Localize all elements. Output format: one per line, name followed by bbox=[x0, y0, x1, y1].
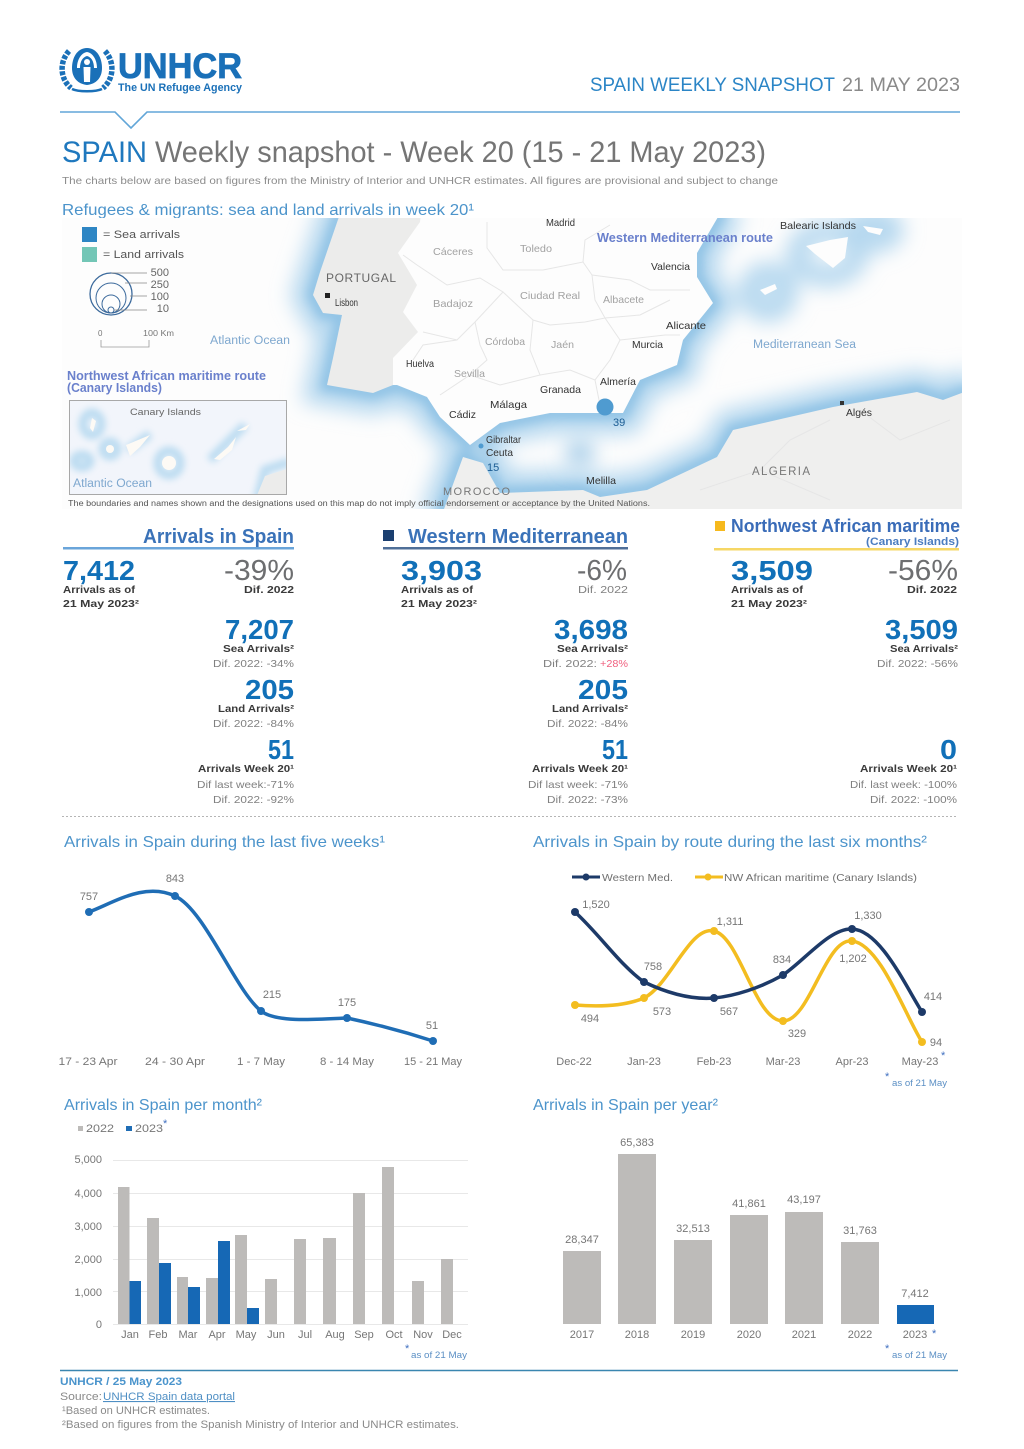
place labels: Alicante bbox=[666, 320, 706, 332]
place labels: Madrid bbox=[546, 217, 575, 229]
chart: arrivals by route: Mar-23 bbox=[766, 1056, 800, 1068]
panel: Arrivals in Spain: 7,207 bbox=[225, 614, 294, 645]
header rule with notch bbox=[60, 112, 960, 128]
logo: UNHCR bbox=[62, 47, 243, 94]
logo: UNHCR: UNHCR bbox=[118, 47, 242, 86]
chart: arrivals last five weeks: 51 bbox=[426, 1020, 438, 1032]
chart: arrivals per month: Oct bbox=[385, 1329, 403, 1341]
panel: Western Mediterranean: Arrivals as of bbox=[401, 584, 474, 596]
chart: arrivals per month: Jun bbox=[267, 1329, 285, 1341]
panel: Arrivals in Spain: -39% bbox=[224, 555, 294, 587]
route labels: (Canary Islands) bbox=[67, 381, 162, 395]
footer: ¹Based on UNHCR estimates. bbox=[62, 1405, 210, 1417]
chart: arrivals by route: Dec-22 bbox=[556, 1056, 592, 1068]
panel: Arrivals in Spain: Dif. 2022: -84% bbox=[213, 718, 294, 730]
place labels: Cádiz bbox=[449, 409, 476, 421]
place labels: Cáceres bbox=[433, 246, 473, 258]
panel: Western Mediterranean: Western Mediterranean bbox=[408, 526, 628, 548]
panel: Northwest African maritime: 21 May 2023² bbox=[731, 598, 808, 610]
place labels: PORTUGAL bbox=[326, 271, 396, 285]
chart: arrivals by route: 834 bbox=[773, 954, 791, 966]
chart legend: NW African maritime (Canary Islands) bbox=[724, 872, 917, 884]
place labels: Badajoz bbox=[433, 298, 473, 310]
land: Spain bbox=[393, 218, 718, 445]
chart: arrivals by route: 758 bbox=[644, 961, 662, 973]
place labels: Ceuta bbox=[486, 447, 513, 459]
chart: arrivals by route: 494 bbox=[581, 1013, 599, 1025]
chart: arrivals per month: Sep bbox=[354, 1329, 374, 1341]
chart: arrivals per month: May bbox=[236, 1329, 257, 1341]
chart: arrivals last five weeks: Arrivals in Spain during the last five weeks¹ bbox=[64, 834, 385, 851]
panel: Arrivals in Spain: Dif. 2022 bbox=[244, 584, 294, 596]
place labels: Murcia bbox=[632, 339, 663, 351]
panel: Northwest African maritime: Sea Arrivals² bbox=[890, 643, 959, 655]
panel: Arrivals in Spain: Dif. 2022: -92% bbox=[213, 794, 294, 806]
chart: arrivals last five weeks: 215 bbox=[263, 989, 281, 1001]
subtitle: The charts below are based on figures from the Ministry of Interior and UNHCR estimates. All figures are provisional and subject to change bbox=[62, 175, 778, 187]
place labels: Lisbon bbox=[335, 297, 358, 309]
chart: arrivals last five weeks: 15 - 21 May bbox=[404, 1056, 462, 1068]
map legend: 10 bbox=[157, 303, 169, 315]
chart: arrivals per month: 5,000 bbox=[74, 1154, 102, 1166]
chart: arrivals per year: 2017 bbox=[570, 1329, 594, 1341]
panel: Western Mediterranean: 51 bbox=[602, 734, 628, 765]
map legend: = Sea arrivals bbox=[103, 229, 181, 241]
title: SPAIN bbox=[62, 136, 147, 169]
panel: Western Mediterranean: Dif. 2022 bbox=[578, 584, 628, 596]
note bbox=[885, 1071, 948, 1088]
note bbox=[885, 1343, 948, 1360]
chart: arrivals per year: 2022 bbox=[848, 1329, 872, 1341]
map legend: 100 bbox=[151, 291, 169, 303]
inset: Canary Islands: Canary Islands bbox=[130, 407, 201, 418]
route labels: Western Mediterranean route bbox=[597, 231, 773, 245]
panel: Arrivals in Spain: Arrivals in Spain bbox=[143, 526, 294, 548]
chart: arrivals per month: 0 bbox=[96, 1319, 102, 1331]
panel: Northwest African maritime bbox=[714, 515, 960, 806]
note: as of 21 May bbox=[411, 1350, 468, 1360]
map: sea, coast and land bbox=[313, 205, 975, 520]
note: * bbox=[885, 1071, 890, 1083]
panel: Western Mediterranean: Dif last week: -71% bbox=[528, 779, 628, 791]
panel: Western Mediterranean: Arrivals Week 20¹ bbox=[532, 763, 629, 775]
chart: arrivals by route: 1,311 bbox=[717, 916, 743, 928]
panel: Western Mediterranean: Dif. 2022: -84% bbox=[547, 718, 628, 730]
chart: arrivals by route: 94 bbox=[930, 1037, 942, 1049]
chart legend: 2022 bbox=[86, 1123, 114, 1135]
chart: arrivals per month: Dec bbox=[442, 1329, 462, 1341]
place labels: Melilla bbox=[586, 475, 616, 487]
chart: arrivals per year: 2023 bbox=[903, 1329, 927, 1341]
panel: Western Mediterranean: -6% bbox=[577, 555, 627, 587]
inset: Canary Islands bbox=[69, 400, 287, 495]
place labels bbox=[325, 217, 872, 498]
chart: arrivals per year: 31,763 bbox=[843, 1225, 877, 1237]
footer: UNHCR Spain data portal bbox=[103, 1391, 235, 1403]
map legend: 0 bbox=[98, 329, 103, 338]
chart: arrivals per year: 65,383 bbox=[620, 1137, 654, 1149]
chart legend bbox=[78, 1118, 168, 1135]
chart: arrivals by route: 414 bbox=[924, 991, 942, 1003]
chart: arrivals per month: Aug bbox=[325, 1329, 345, 1341]
chart: arrivals by route: Arrivals in Spain by route during the last six months² bbox=[533, 834, 928, 851]
place labels: Córdoba bbox=[485, 336, 525, 348]
chart: arrivals per year: Arrivals in Spain per year² bbox=[533, 1097, 719, 1114]
panel: Northwest African maritime: Arrivals as of bbox=[731, 584, 804, 596]
panel: Arrivals in Spain: 51 bbox=[268, 734, 294, 765]
chart: arrivals per year: 2021 bbox=[792, 1329, 816, 1341]
chart: arrivals by route: Feb-23 bbox=[697, 1056, 731, 1068]
panel: Arrivals in Spain: Arrivals Week 20¹ bbox=[198, 763, 295, 775]
chart: arrivals by route: May-23 bbox=[902, 1056, 938, 1068]
chart: arrivals per month: 1,000 bbox=[74, 1287, 102, 1299]
panel: Northwest African maritime: 0 bbox=[940, 734, 957, 765]
panel: Arrivals in Spain: Dif last week:-71% bbox=[197, 779, 294, 791]
chart: arrivals per year: 41,861 bbox=[732, 1198, 766, 1210]
footer: ²Based on figures from the Spanish Ministry of Interior and UNHCR estimates. bbox=[62, 1419, 459, 1431]
place labels: Sevilla bbox=[454, 368, 485, 380]
title: Weekly snapshot - Week 20 (15 - 21 May 2023) bbox=[155, 136, 766, 169]
place labels: Balearic Islands bbox=[780, 220, 856, 232]
map legend: 100 Km bbox=[143, 329, 174, 338]
panel: Western Mediterranean: 3,903 bbox=[401, 555, 482, 586]
panel: Northwest African maritime: 3,509 bbox=[885, 614, 958, 645]
panel: Northwest African maritime: Dif. 2022: -100% bbox=[870, 794, 957, 806]
panel: Western Mediterranean: 205 bbox=[578, 674, 628, 705]
panel: Arrivals in Spain: 205 bbox=[245, 674, 294, 705]
place labels: Albacete bbox=[603, 294, 644, 306]
chart: arrivals by route: 1,202 bbox=[839, 953, 867, 965]
panel: Northwest African maritime: Dif. 2022 bbox=[907, 584, 957, 596]
panel: Arrivals in Spain: Land Arrivals² bbox=[218, 703, 295, 715]
panel: Western Mediterranean: 21 May 2023² bbox=[401, 598, 478, 610]
chart: arrivals by route: * bbox=[941, 1050, 946, 1062]
panel: Arrivals in Spain: Arrivals as of bbox=[63, 584, 136, 596]
chart legend bbox=[572, 872, 917, 884]
land: Portugal bbox=[313, 205, 422, 393]
panel: Western Mediterranean bbox=[383, 526, 629, 806]
panel: Arrivals in Spain bbox=[63, 526, 295, 806]
chart: arrivals per month bbox=[64, 1097, 468, 1360]
chart: arrivals by route: 573 bbox=[653, 1006, 671, 1018]
place labels: Toledo bbox=[520, 243, 552, 255]
route labels bbox=[67, 231, 773, 395]
chart: arrivals per year: * bbox=[932, 1328, 937, 1340]
map legend: 250 bbox=[151, 279, 169, 291]
chart: arrivals per month: Jan bbox=[121, 1329, 139, 1341]
map legend: 500 bbox=[151, 267, 169, 279]
chart legend: Western Med. bbox=[602, 872, 673, 884]
chart: arrivals per year: 2019 bbox=[681, 1329, 705, 1341]
place labels: Málaga bbox=[490, 399, 527, 411]
chart: arrivals per year: 7,412 bbox=[901, 1288, 929, 1300]
place labels: Almería bbox=[600, 376, 636, 388]
panel: Western Mediterranean: Dif. 2022: bbox=[543, 658, 597, 670]
panel: Western Mediterranean: +28% bbox=[600, 658, 628, 670]
panel: Western Mediterranean: Sea Arrivals² bbox=[557, 643, 629, 655]
place labels: Huelva bbox=[406, 358, 434, 370]
land: North Africa bbox=[444, 392, 962, 509]
report header label: 21 MAY 2023 bbox=[842, 75, 960, 96]
report header label: SPAIN WEEKLY SNAPSHOT bbox=[590, 75, 835, 96]
chart: arrivals per month: Mar bbox=[179, 1329, 198, 1341]
chart: arrivals per month: Apr bbox=[208, 1329, 226, 1341]
chart: arrivals per month: Jul bbox=[298, 1329, 312, 1341]
map legend: = Land arrivals bbox=[103, 249, 185, 261]
chart: arrivals last five weeks: 1 - 7 May bbox=[237, 1056, 286, 1068]
panel: Northwest African maritime: Northwest African maritime bbox=[731, 515, 960, 536]
inset: Canary Islands: Atlantic Ocean bbox=[73, 478, 152, 490]
place labels: ALGERIA bbox=[752, 466, 810, 478]
panel: Northwest African maritime: Dif. last week: -100% bbox=[850, 779, 957, 791]
chart: arrivals by route: 1,330 bbox=[854, 910, 882, 922]
chart: arrivals per year: 32,513 bbox=[676, 1223, 710, 1235]
footer bbox=[60, 1376, 459, 1431]
note: as of 21 May bbox=[892, 1078, 948, 1088]
chart: arrivals by route: Jan-23 bbox=[627, 1056, 661, 1068]
panel: Northwest African maritime: -56% bbox=[888, 555, 958, 587]
chart: arrivals by route: 567 bbox=[720, 1006, 738, 1018]
chart: arrivals per year: 43,197 bbox=[787, 1194, 821, 1206]
panel: Northwest African maritime: (Canary Islands) bbox=[866, 536, 959, 548]
chart: arrivals per year: 2018 bbox=[625, 1329, 649, 1341]
note: * bbox=[885, 1343, 890, 1355]
chart: arrivals by route: Apr-23 bbox=[835, 1056, 869, 1068]
note: as of 21 May bbox=[892, 1350, 948, 1360]
logo: UNHCR: The UN Refugee Agency bbox=[118, 82, 243, 94]
place labels: Jaén bbox=[551, 339, 574, 351]
chart: arrivals last five weeks: 17 - 23 Apr bbox=[58, 1056, 118, 1068]
panel: Western Mediterranean: Dif. 2022: -73% bbox=[547, 794, 628, 806]
chart: arrivals per month: Arrivals in Spain per month² bbox=[64, 1097, 263, 1114]
chart: arrivals per month: 4,000 bbox=[74, 1188, 102, 1200]
chart: arrivals last five weeks: 757 bbox=[80, 891, 98, 903]
panel: Northwest African maritime: 3,509 bbox=[731, 555, 813, 586]
chart: arrivals per month: 2,000 bbox=[74, 1254, 102, 1266]
panel: Northwest African maritime: Arrivals Week 20¹ bbox=[860, 763, 958, 775]
panel: Arrivals in Spain: 7,412 bbox=[63, 555, 135, 586]
place labels: Ciudad Real bbox=[520, 290, 580, 302]
footer: Source: bbox=[60, 1391, 102, 1403]
sea labels bbox=[210, 335, 857, 351]
footer: UNHCR / 25 May 2023 bbox=[60, 1376, 182, 1388]
chart: arrivals last five weeks: 8 - 14 May bbox=[320, 1056, 375, 1068]
place labels: MOROCCO bbox=[443, 486, 510, 498]
chart: arrivals per year: 28,347 bbox=[565, 1234, 599, 1246]
arrivals markers: 39 bbox=[613, 417, 625, 429]
chart: arrivals by route: 329 bbox=[788, 1028, 806, 1040]
arrivals markers: 15 bbox=[487, 462, 499, 474]
panel: Arrivals in Spain: 21 May 2023² bbox=[63, 598, 140, 610]
map heading: Refugees & migrants: sea and land arrivals in week 20¹ bbox=[62, 202, 474, 219]
map legend bbox=[82, 227, 185, 347]
place labels: Valencia bbox=[651, 261, 690, 273]
note bbox=[405, 1343, 468, 1360]
sea labels: Mediterranean Sea bbox=[753, 339, 857, 351]
note: * bbox=[405, 1343, 410, 1355]
panel: Western Mediterranean: 3,698 bbox=[554, 614, 628, 645]
route labels: Northwest African maritime route bbox=[67, 369, 266, 383]
chart: arrivals last five weeks: 24 - 30 Apr bbox=[145, 1056, 205, 1068]
chart: arrivals by route bbox=[533, 834, 948, 1088]
panel: Western Mediterranean: Land Arrivals² bbox=[552, 703, 629, 715]
panel: Arrivals in Spain: Sea Arrivals² bbox=[223, 643, 295, 655]
arrivals markers bbox=[478, 398, 625, 474]
place labels: Gibraltar bbox=[486, 434, 521, 446]
chart: arrivals last five weeks bbox=[58, 834, 462, 1068]
report header label bbox=[590, 75, 960, 96]
chart: arrivals per month: Feb bbox=[149, 1329, 167, 1341]
sea labels: Atlantic Ocean bbox=[210, 335, 290, 347]
chart: arrivals per year bbox=[533, 1097, 948, 1360]
panel: Northwest African maritime: Dif. 2022: -56% bbox=[877, 658, 958, 670]
map disclaimer: The boundaries and names shown and the designations used on this map do not imply official endorsement or acceptance by the United Nations. bbox=[68, 499, 650, 508]
chart: arrivals by route: 1,520 bbox=[582, 899, 610, 911]
panel: map bbox=[62, 205, 975, 520]
place labels: Algés bbox=[846, 407, 872, 419]
chart: arrivals last five weeks: 175 bbox=[338, 997, 356, 1009]
icon: UNHCR emblem bbox=[62, 48, 112, 91]
chart: arrivals per month: 3,000 bbox=[74, 1221, 102, 1233]
chart legend: * bbox=[163, 1118, 168, 1130]
chart: arrivals last five weeks: 843 bbox=[166, 873, 184, 885]
chart: arrivals per year: 2020 bbox=[737, 1329, 761, 1341]
chart: arrivals per month: Nov bbox=[413, 1329, 433, 1341]
place labels: Granada bbox=[540, 384, 581, 396]
chart legend: 2023 bbox=[135, 1123, 163, 1135]
panel: Arrivals in Spain: Dif. 2022: -34% bbox=[213, 658, 294, 670]
